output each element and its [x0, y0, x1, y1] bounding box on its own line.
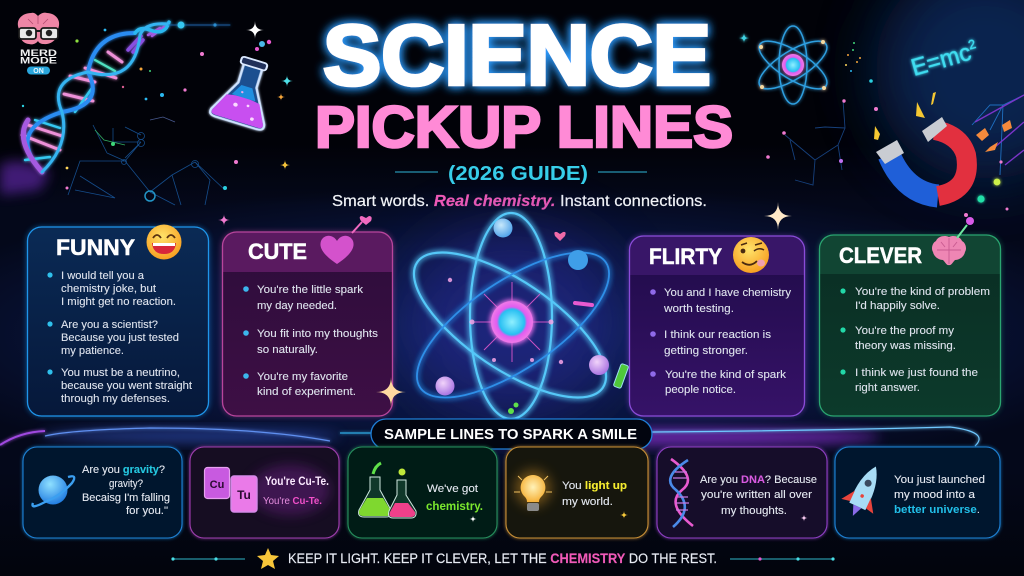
rocket text	[894, 474, 985, 516]
panel: funny	[27, 224, 209, 416]
dna text: my thoughts.	[721, 505, 787, 517]
tagline: Smart words. Real chemistry. Instant connections.	[332, 193, 707, 210]
rocket text: You just launched	[894, 474, 985, 486]
icon: flask	[209, 21, 293, 170]
funny lines: chemistry joke, but	[61, 283, 157, 295]
section pill: sample lines: SAMPLE LINES TO SPARK A SMILE	[384, 426, 637, 443]
gravity text: gravity?	[109, 478, 143, 490]
cute lines: so naturally.	[257, 344, 318, 356]
icon: planet	[32, 476, 74, 506]
rocket text: my mood into a	[894, 489, 976, 501]
card: chemistry	[348, 447, 497, 538]
funny lines	[61, 270, 193, 405]
card: light up	[506, 447, 648, 538]
cute lines: You fit into my thoughts	[257, 328, 378, 340]
logo wordmark: MERD	[20, 48, 57, 59]
icon: winking emoji	[733, 237, 769, 273]
central atom	[393, 213, 630, 424]
cute lines: You're my favorite	[257, 371, 348, 383]
clever bullets	[840, 288, 846, 375]
formula: e=mc2: 2	[966, 36, 977, 52]
electrons	[436, 218, 609, 396]
molecule network left	[68, 117, 225, 205]
dna text: Are you DNA? Because	[700, 474, 817, 486]
heading: pickup lines: PICKUP LINES	[315, 95, 733, 160]
title	[315, 8, 733, 210]
section pill: sample lines	[371, 419, 652, 449]
clever lines: You're the proof my	[855, 325, 954, 337]
rocket text: better universe.	[894, 504, 980, 516]
icon: laughing emoji	[146, 224, 182, 260]
icon: heart	[320, 216, 372, 264]
funny lines: I would tell you a	[61, 270, 145, 282]
gravity text	[82, 464, 170, 517]
flirty lines: getting stronger.	[664, 345, 748, 357]
scattered particles	[22, 29, 1009, 217]
funny lines: through my defenses.	[61, 393, 170, 405]
icon: periodic tiles: Cu	[210, 479, 224, 491]
cu-te text: You're Cu-Te.	[265, 476, 329, 488]
clever heading: CLEVER	[839, 243, 922, 268]
footer text: KEEP IT LIGHT. KEEP IT CLEVER, LET THE CHEMISTRY DO THE REST.	[288, 551, 717, 566]
flirty lines: You're the kind of spark	[665, 369, 786, 381]
chemistry text	[426, 483, 483, 522]
card: dna	[657, 447, 827, 538]
logo: nerd mode on	[18, 13, 59, 75]
chemistry text: We've got	[427, 483, 479, 495]
flirty lines: I think our reaction is	[664, 329, 771, 341]
flirty heading: FLIRTY	[649, 244, 722, 269]
gravity text: for you."	[126, 505, 168, 517]
icon: periodic tiles	[204, 468, 257, 512]
flirty bullets	[650, 289, 656, 377]
card: rocket	[835, 447, 1000, 538]
clever lines: right answer.	[855, 382, 920, 394]
icon: small atom	[739, 26, 833, 104]
icon: mini dna	[670, 459, 693, 527]
footer line	[171, 548, 835, 569]
icon: brain	[932, 217, 974, 265]
icon: dna helix	[22, 22, 230, 172]
clever lines: You're the kind of problem	[855, 286, 990, 298]
flirty lines	[663, 287, 791, 396]
funny lines: my patience.	[61, 345, 124, 357]
cute lines: You're the little spark	[257, 284, 363, 296]
panel: flirty	[629, 236, 805, 416]
panel: clever	[819, 217, 1001, 416]
funny lines: I might get no reaction.	[61, 296, 176, 308]
nucleus rays	[448, 278, 563, 364]
card: gravity	[23, 447, 182, 538]
formula: e=mc2: E=mc	[908, 39, 975, 82]
funny heading: FUNNY	[56, 235, 135, 260]
gravity text: Becaisg I'm falling	[82, 492, 170, 504]
orbits	[393, 213, 630, 424]
nucleus	[491, 301, 533, 343]
funny lines: because you went straight	[61, 380, 193, 392]
icon: light bulb	[514, 470, 552, 511]
light up text: my world.	[562, 496, 613, 508]
cu-te text: You're Cu-Te.	[263, 495, 322, 507]
panel: cute	[222, 216, 393, 416]
cute lines: my day needed.	[257, 300, 337, 312]
heading: science: SCIENCE	[323, 8, 711, 104]
divider swoosh lines	[0, 427, 979, 446]
card: cu-te	[190, 447, 339, 538]
logo: nerd mode on: MODE	[20, 56, 57, 66]
logo on badge: ON	[33, 68, 44, 75]
clever lines	[855, 286, 990, 394]
clever lines: I think we just found the	[855, 367, 978, 379]
icon: flasks	[359, 463, 416, 518]
dna text: you're written all over	[701, 489, 812, 501]
cute heading: CUTE	[248, 239, 307, 264]
cute bullets	[243, 286, 249, 379]
light up text	[562, 480, 628, 519]
chemistry text: chemistry.	[426, 501, 483, 513]
funny lines: You must be a neutrino,	[61, 367, 180, 379]
atom sparks, heart and vial	[218, 202, 792, 414]
molecule network right	[785, 95, 1024, 185]
icon: horseshoe magnet	[874, 92, 1012, 196]
cu-te text	[263, 476, 329, 507]
funny lines: Are you a scientist?	[61, 319, 158, 331]
dna text	[700, 474, 817, 522]
flirty lines: You and I have chemistry	[664, 287, 791, 299]
funny bullets	[47, 272, 53, 375]
cute lines: kind of experiment.	[257, 386, 356, 398]
subtitle: 2026 guide: (2026 GUIDE)	[448, 163, 588, 185]
clever lines: theory was missing.	[855, 340, 956, 352]
clever lines: I'd happily solve.	[855, 300, 940, 312]
cute lines	[257, 284, 378, 398]
flirty lines: people notice.	[665, 384, 736, 396]
gravity text: Are you gravity?	[82, 464, 165, 476]
icon: periodic tiles: Tu	[237, 488, 251, 502]
icon: brain with glasses	[18, 13, 59, 44]
icon: rocket	[837, 459, 892, 523]
funny lines: Because you just tested	[61, 332, 179, 344]
icon: star	[257, 548, 279, 569]
flirty lines: worth testing.	[663, 303, 734, 315]
light up text: You light up	[562, 480, 627, 492]
